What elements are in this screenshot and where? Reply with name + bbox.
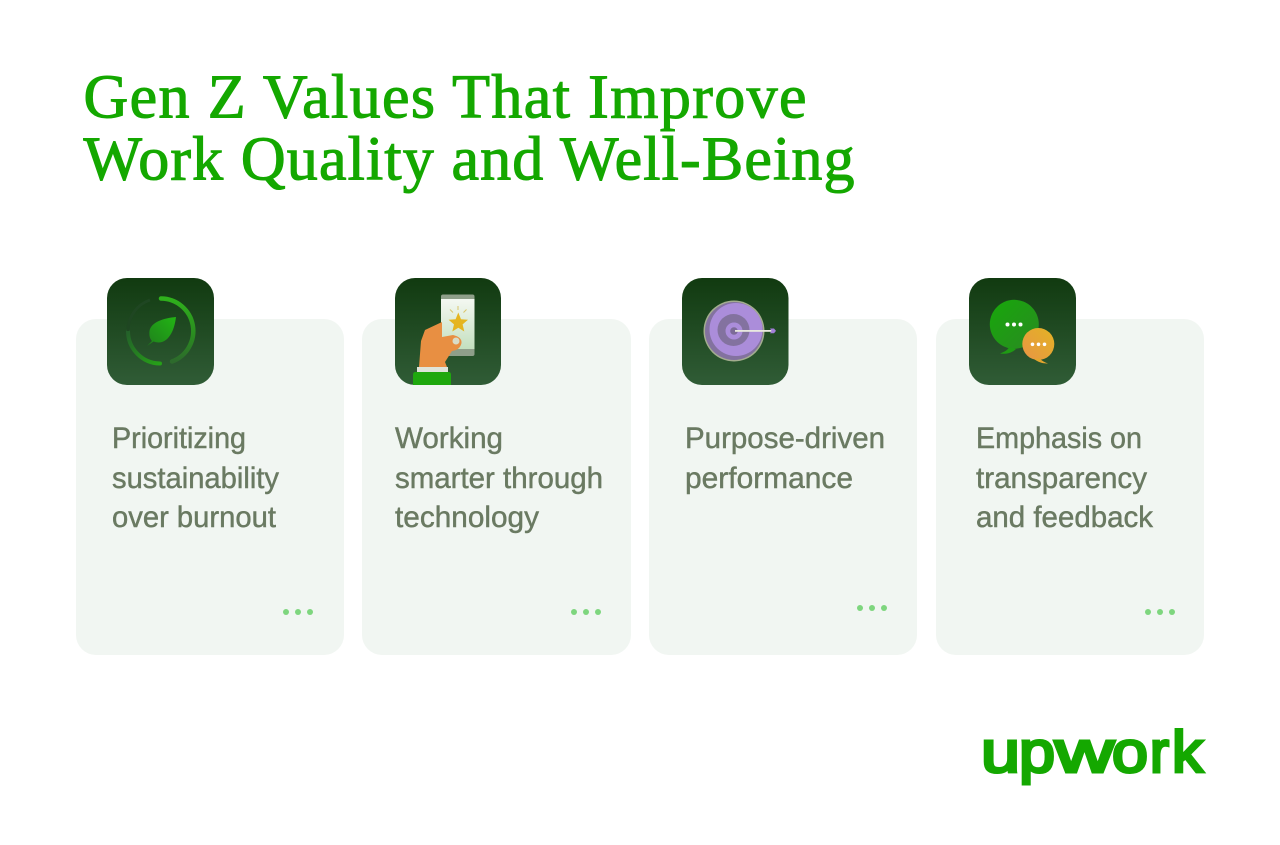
text: working smarter xyxy=(395,422,603,534)
text: emphasis on transparency: and feedback xyxy=(976,501,1154,534)
dots xyxy=(283,609,313,615)
text: prioritizing sustainability xyxy=(112,422,279,534)
icon: chat bubbles xyxy=(969,278,1076,385)
text: prioritizing sustainability: over burnout xyxy=(112,501,277,534)
text: prioritizing sustainability: Prioritizing xyxy=(112,422,246,455)
title xyxy=(84,64,854,194)
text: purpose-driven: Purpose-driven xyxy=(685,422,885,455)
logo: upwork: p xyxy=(1019,720,1055,785)
logo: upwork: u xyxy=(981,720,1020,785)
text: emphasis on transparency: transparency xyxy=(976,462,1147,495)
text: emphasis on transparency: Emphasis on xyxy=(976,422,1142,455)
dots xyxy=(571,609,601,615)
icon: leaf in ring xyxy=(107,278,214,385)
text: emphasis on transparency xyxy=(976,422,1154,534)
text: purpose-driven: performance xyxy=(685,462,853,495)
icon: target with arrow xyxy=(682,278,788,385)
panel: purpose xyxy=(649,278,917,655)
title: Gen Z Values That Improve xyxy=(84,64,806,132)
logo: upwork: r xyxy=(1150,720,1169,785)
title: Work Quality and Well-Being xyxy=(84,126,854,194)
icon: hand holding phone xyxy=(395,278,501,385)
text: prioritizing sustainability: sustainability xyxy=(112,462,279,495)
dots xyxy=(1145,609,1175,615)
text: working smarter: Working xyxy=(395,422,503,455)
text: working smarter: technology xyxy=(395,501,539,534)
text: working smarter: smarter through xyxy=(395,462,603,495)
dots xyxy=(857,605,887,611)
panel: transparency xyxy=(936,278,1204,655)
panel: sustainability xyxy=(76,278,344,655)
logo: upwork: w xyxy=(1054,720,1116,785)
panel: technology xyxy=(362,278,631,655)
logo: upwork xyxy=(981,720,1204,785)
logo: upwork: k xyxy=(1172,720,1204,785)
text: purpose-driven xyxy=(685,422,885,495)
logo: upwork: o xyxy=(1112,720,1148,785)
